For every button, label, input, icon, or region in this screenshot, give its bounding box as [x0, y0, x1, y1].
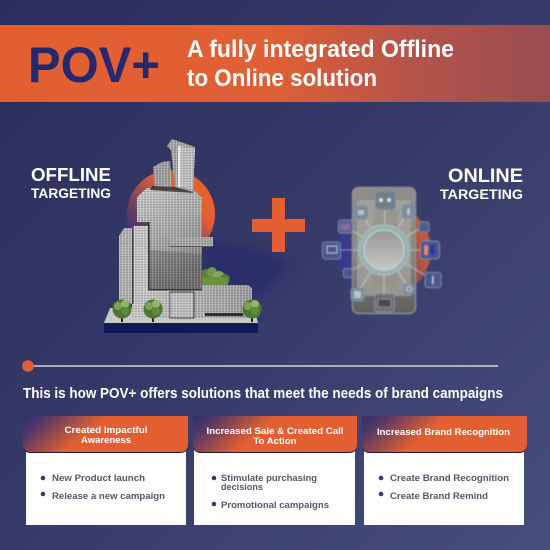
illustration: phone with app icons [322, 188, 441, 314]
card 3 list: Create Brand Recognition [390, 473, 509, 484]
card 2 list: decisions [221, 482, 263, 493]
banner title: A fully integrated Offline [187, 36, 454, 63]
card 1 title [64, 425, 148, 446]
app icon tiles [322, 192, 441, 312]
banner title: to Online solution [187, 65, 377, 92]
card 2 list: Promotional campaigns [221, 500, 329, 511]
connector lines [331, 205, 433, 303]
card 1 list [41, 473, 165, 502]
card 2 title: Increased Sale & Created Call [206, 426, 344, 437]
card 3 [362, 416, 527, 525]
app icon glyphs [327, 198, 435, 307]
main tower [137, 188, 213, 289]
podium [132, 285, 252, 318]
tree 3 [242, 300, 262, 322]
offline targeting label: OFFLINE [31, 165, 111, 185]
online targeting label: TARGETING [440, 187, 523, 202]
card 2 list: Stimulate purchasing [221, 473, 317, 484]
central lens [359, 225, 409, 275]
card 1 [23, 416, 188, 525]
illustration: office building [104, 139, 262, 333]
card 3 list: Create Brand Remind [390, 491, 488, 502]
left wing [119, 226, 148, 318]
header banner [0, 25, 550, 102]
online targeting label: ONLINE [448, 166, 523, 187]
logo: POV+: POV+ [28, 37, 160, 93]
banner title [187, 36, 454, 92]
card 2 list [212, 473, 329, 511]
card 3 title: Increased Brand Recognition [377, 427, 510, 438]
offline targeting label [31, 165, 111, 201]
icon: plus sign [252, 198, 305, 252]
divider with dot [22, 360, 498, 372]
card 2 header [193, 416, 357, 452]
base platform [104, 308, 258, 333]
section heading: This is how POV+ offers solutions that meet the needs of brand campaigns [23, 386, 503, 402]
top tier [167, 139, 195, 192]
card 3 list [379, 473, 509, 502]
bush on terrace [200, 267, 230, 285]
building shadow [202, 244, 292, 298]
sun circle behind phone [337, 203, 431, 297]
upper tier [150, 161, 193, 193]
card 1 list: New Product launch [52, 473, 145, 484]
tree 2 [144, 300, 162, 322]
online targeting label [440, 166, 523, 202]
icon: sun circle behind building [127, 170, 215, 258]
card 2 [193, 416, 357, 525]
tree 1 [112, 300, 132, 322]
phone body [352, 188, 416, 314]
card 1 list: Release a new campaign [52, 491, 165, 502]
card 1 header [23, 416, 188, 452]
card 2 title [206, 426, 344, 447]
offline targeting label: TARGETING [31, 186, 111, 201]
card 3 header [362, 416, 527, 452]
card 1 title: Awareness [81, 435, 131, 446]
card 2 title: To Action [254, 436, 297, 447]
card 1 title: Created Impactful [64, 425, 148, 436]
